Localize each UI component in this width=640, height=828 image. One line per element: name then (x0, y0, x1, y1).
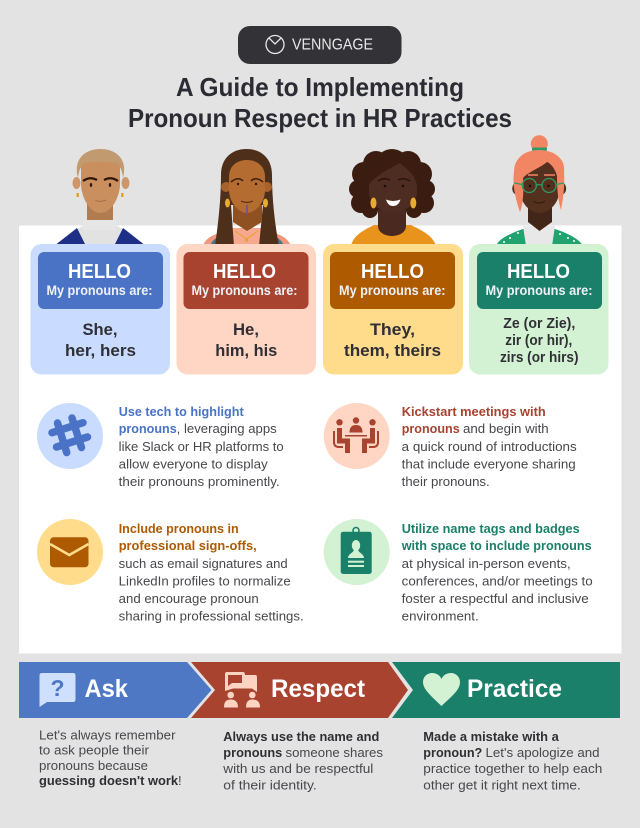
text: use tech: Use tech to highlight (119, 404, 244, 419)
text: sign-offs: and encourage pronoun (119, 591, 259, 606)
text: meetings: Kickstart meetings with (402, 404, 546, 419)
text: sign-offs: professional sign-offs, (119, 538, 257, 553)
card: he him his: him, his (215, 341, 277, 360)
badge: hello green (477, 252, 602, 309)
badge: hello blue (38, 252, 163, 309)
text: practice description: Made a mistake with a (423, 729, 560, 744)
badge: hello green: My pronouns are: (486, 283, 592, 298)
text: use tech: allow everyone to display (119, 456, 268, 472)
arrow: ask: Ask (84, 675, 128, 703)
text: name tags: environment. (402, 608, 479, 624)
badge: hello green: HELLO (507, 261, 570, 283)
badge: hello amber: HELLO (361, 261, 424, 283)
title: Pronoun Respect in HR Practices (128, 103, 512, 133)
text: respect description: pronouns (223, 745, 282, 760)
icon: slack hash (37, 403, 103, 469)
text: ask description (39, 728, 182, 788)
card: they them theirs: They, (370, 320, 415, 339)
arrow: practice (392, 662, 620, 718)
badge: hello red (184, 252, 308, 309)
text: ask description: ! (178, 773, 182, 788)
text: name tags (401, 521, 593, 624)
card: ze zir zirs: zirs (or hirs) (500, 350, 579, 366)
text: practice description: pronoun? (423, 745, 482, 760)
text: meetings: that include everyone sharing (402, 456, 576, 472)
card: she her hers: her, hers (65, 341, 136, 360)
text: ask description: Let's always remember (39, 728, 176, 742)
text: name tags: with space to include pronouns (401, 538, 592, 553)
logo badge (238, 26, 402, 64)
badge: hello red: HELLO (213, 261, 276, 283)
person 1 (54, 149, 146, 246)
card: he him his: He, (233, 320, 259, 339)
text: name tags: foster a respectful and inclusive (402, 591, 589, 606)
arrow: practice: Practice (467, 675, 562, 703)
text: practice description: other get it right next time. (423, 778, 581, 792)
text: use tech: , leveraging apps (177, 421, 277, 436)
text: use tech (119, 404, 284, 489)
card: she her hers: She, (82, 320, 118, 339)
text: use tech: their pronouns prominently. (119, 474, 280, 489)
text: practice description: practice together to help each (423, 761, 602, 776)
icon: question bubble (40, 673, 76, 707)
icon: envelope (37, 519, 103, 585)
person 2 (203, 149, 291, 246)
text: practice description (423, 729, 602, 792)
text: sign-offs: LinkedIn profiles to normalize (119, 574, 291, 588)
text: respect description: with us and be respectful (222, 761, 373, 776)
icon: question bubble: ? (50, 675, 65, 701)
card: they them theirs (323, 244, 463, 374)
icon: name badge (324, 519, 390, 585)
text: meetings: and begin with (463, 421, 549, 436)
text: sign-offs: sharing in professional settings. (119, 608, 304, 624)
text: ask description: guessing doesn't work (39, 773, 179, 788)
card: they them theirs: them, theirs (344, 341, 441, 360)
arrow: respect (191, 662, 408, 718)
text: meetings: pronouns (402, 421, 460, 436)
badge: hello blue: My pronouns are: (46, 283, 152, 298)
text: use tech: like Slack or HR platforms to (119, 439, 284, 454)
icon: meeting table (324, 403, 390, 469)
icon: heart (423, 673, 460, 706)
card: ze zir zirs: zir (or hir), (505, 333, 572, 349)
text: respect description: of their identity. (223, 778, 317, 792)
title (128, 72, 512, 133)
icon: people talking (224, 672, 260, 708)
card: she her hers (30, 244, 170, 374)
badge: hello blue: HELLO (68, 261, 131, 283)
text: respect description: someone shares (286, 745, 383, 760)
text: respect description: Always use the name and (223, 729, 379, 744)
arrow: respect: Respect (271, 675, 366, 703)
text: practice description: Let's apologize and (486, 745, 600, 760)
text: meetings: their pronouns. (402, 474, 490, 489)
card: he him his (176, 244, 316, 374)
white content panel (19, 226, 622, 654)
logo badge: VENNGAGE (292, 36, 373, 54)
text: name tags: at physical in-person events, (402, 556, 571, 571)
text: ask description: pronouns because (39, 758, 148, 773)
person 3 (349, 149, 436, 246)
person 4 (496, 135, 583, 246)
card: ze zir zirs: Ze (or Zie), (503, 316, 575, 332)
text: respect description (222, 729, 383, 792)
arrow: ask (19, 662, 212, 718)
text: sign-offs: Include pronouns in (119, 521, 239, 536)
text: sign-offs: such as email signatures and (119, 556, 288, 571)
title: A Guide to Implementing (176, 72, 464, 102)
badge: hello red: My pronouns are: (192, 283, 298, 298)
badge: hello amber (330, 252, 455, 309)
text: ask description: to ask people their (39, 742, 150, 758)
text: meetings (402, 404, 577, 489)
text: meetings: a quick round of introductions (402, 439, 577, 454)
text: use tech: pronouns (119, 421, 177, 436)
text: name tags: Utilize name tags and badges (402, 521, 580, 536)
text: sign-offs (119, 521, 304, 624)
card: ze zir zirs (469, 244, 608, 374)
text: name tags: conferences, and/or meetings to (402, 574, 593, 588)
badge: hello amber: My pronouns are: (339, 283, 446, 298)
